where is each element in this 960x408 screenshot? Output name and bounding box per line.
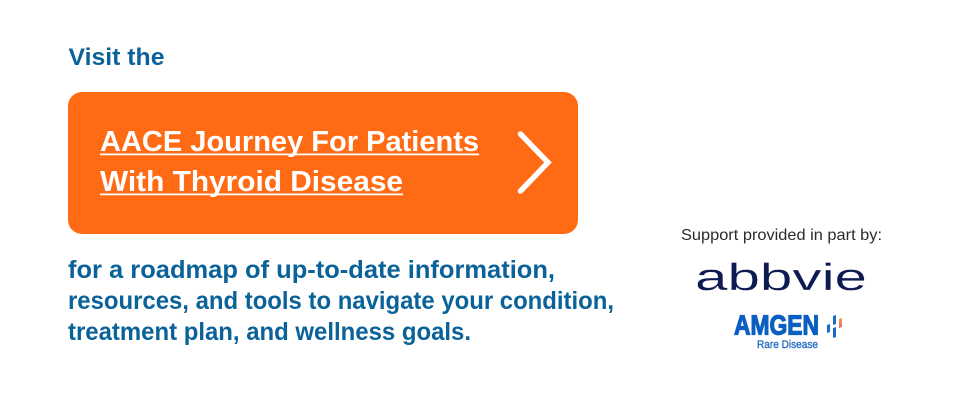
button label: With Thyroid Disease [100,166,403,198]
call-to-action button [68,92,578,234]
icon: chevron arrow [520,134,548,191]
support credit: Support provided in part by: [681,227,882,244]
description text: treatment plan, and wellness goals. [68,318,471,346]
logo: amgen rare disease [734,309,842,351]
amgen icon [827,315,842,338]
heading: visit the: Visit the [68,44,164,71]
button label [100,126,479,198]
amgen wordmark: AMGEN [734,309,819,340]
description text: for a roadmap of up-to-date information, [68,256,555,284]
description text: resources, and tools to navigate your condition, [68,287,614,315]
description text [68,256,614,346]
button label: AACE Journey For Patients [100,126,479,158]
rare disease label: Rare Disease [757,339,818,351]
button background [68,92,578,234]
logo: abbvie: abbvie [695,257,867,299]
